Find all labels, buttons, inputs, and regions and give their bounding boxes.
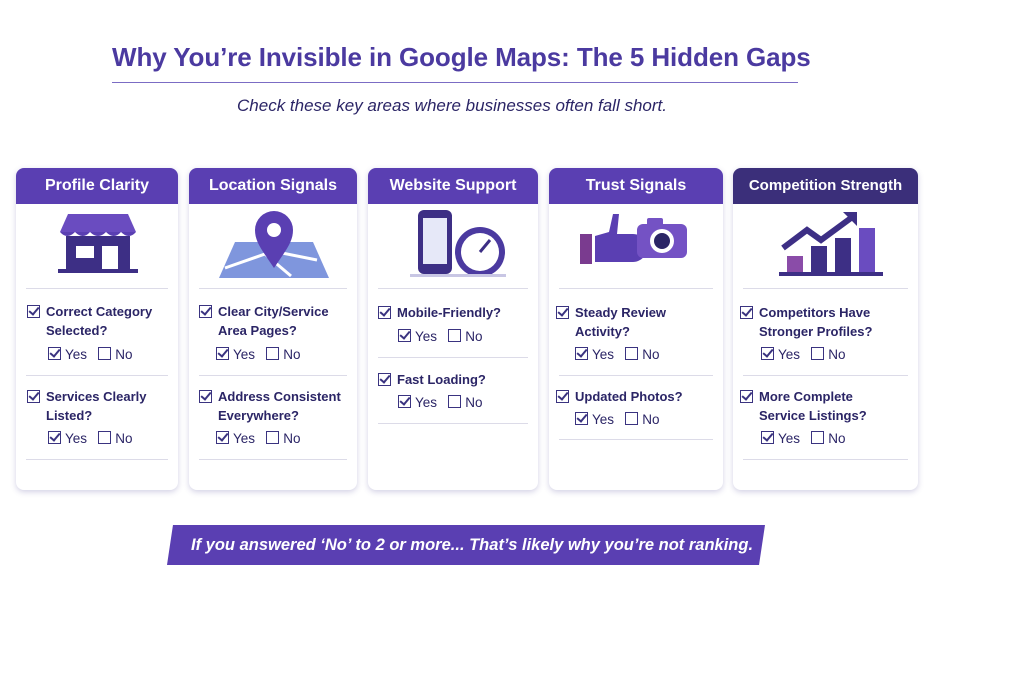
panel: competition strength: Yes No — [778, 347, 846, 362]
panel: competition strength: Yes No — [778, 431, 846, 446]
panel: competition strength: More Complete — [759, 389, 853, 404]
icon: growth chart — [779, 212, 883, 276]
panel: website support: Yes No — [415, 395, 483, 410]
callout banner — [167, 525, 765, 565]
panel: location signals: Yes No — [233, 347, 301, 362]
panel: location signals: Location Signals — [209, 177, 337, 194]
panel: competition strength: Stronger Profiles? — [759, 324, 872, 339]
panel: competition strength: Competition Strength — [749, 177, 902, 194]
panel: website support: Yes No — [415, 329, 483, 344]
icon: phone and speedometer — [410, 210, 506, 277]
panel: trust signals: Steady Review — [575, 305, 666, 320]
panel: trust signals: Yes No — [592, 347, 660, 362]
panel: profile clarity: Profile Clarity — [45, 177, 149, 194]
panel: location signals: Address Consistent — [218, 389, 341, 404]
icon: map pin — [219, 211, 329, 278]
icon: storefront — [58, 214, 138, 273]
panel: trust signals: Trust Signals — [586, 177, 686, 194]
panel: location signals: Area Pages? — [218, 323, 297, 338]
panel: website support — [368, 168, 538, 490]
icon: thumbs up and camera — [580, 214, 687, 264]
panel: profile clarity — [16, 168, 178, 490]
panel: profile clarity: Yes No — [65, 431, 133, 446]
panel: competition strength: Service Listings? — [759, 408, 867, 423]
panel: profile clarity: Yes No — [65, 347, 133, 362]
panel: trust signals: Yes No — [592, 412, 660, 427]
title: Why You’re Invisible in Google Maps: The 5 Hidden Gaps — [112, 42, 811, 72]
panel: profile clarity: Services Clearly — [46, 389, 146, 404]
panel: profile clarity: Listed? — [46, 408, 92, 423]
callout banner: If you answered ‘No’ to 2 or more... That’s likely why you’re not ranking. — [191, 536, 753, 554]
panel: profile clarity: Correct Category — [46, 304, 152, 319]
subtitle: Check these key areas where businesses often fall short. — [237, 96, 667, 115]
panel: trust signals: Updated Photos? — [575, 389, 683, 404]
panel: website support: Mobile-Friendly? — [397, 305, 501, 320]
panel: location signals — [189, 168, 357, 490]
panel: trust signals — [549, 168, 723, 490]
panel: location signals: Clear City/Service — [218, 304, 329, 319]
panel: location signals: Everywhere? — [218, 408, 299, 423]
panel: website support: Fast Loading? — [397, 372, 486, 387]
panel: location signals: Yes No — [233, 431, 301, 446]
panel: website support: Website Support — [390, 177, 516, 194]
panel: profile clarity: Selected? — [46, 323, 107, 338]
panel: competition strength — [733, 168, 918, 490]
panel: trust signals: Activity? — [575, 324, 630, 339]
panel: competition strength: Competitors Have — [759, 305, 870, 320]
